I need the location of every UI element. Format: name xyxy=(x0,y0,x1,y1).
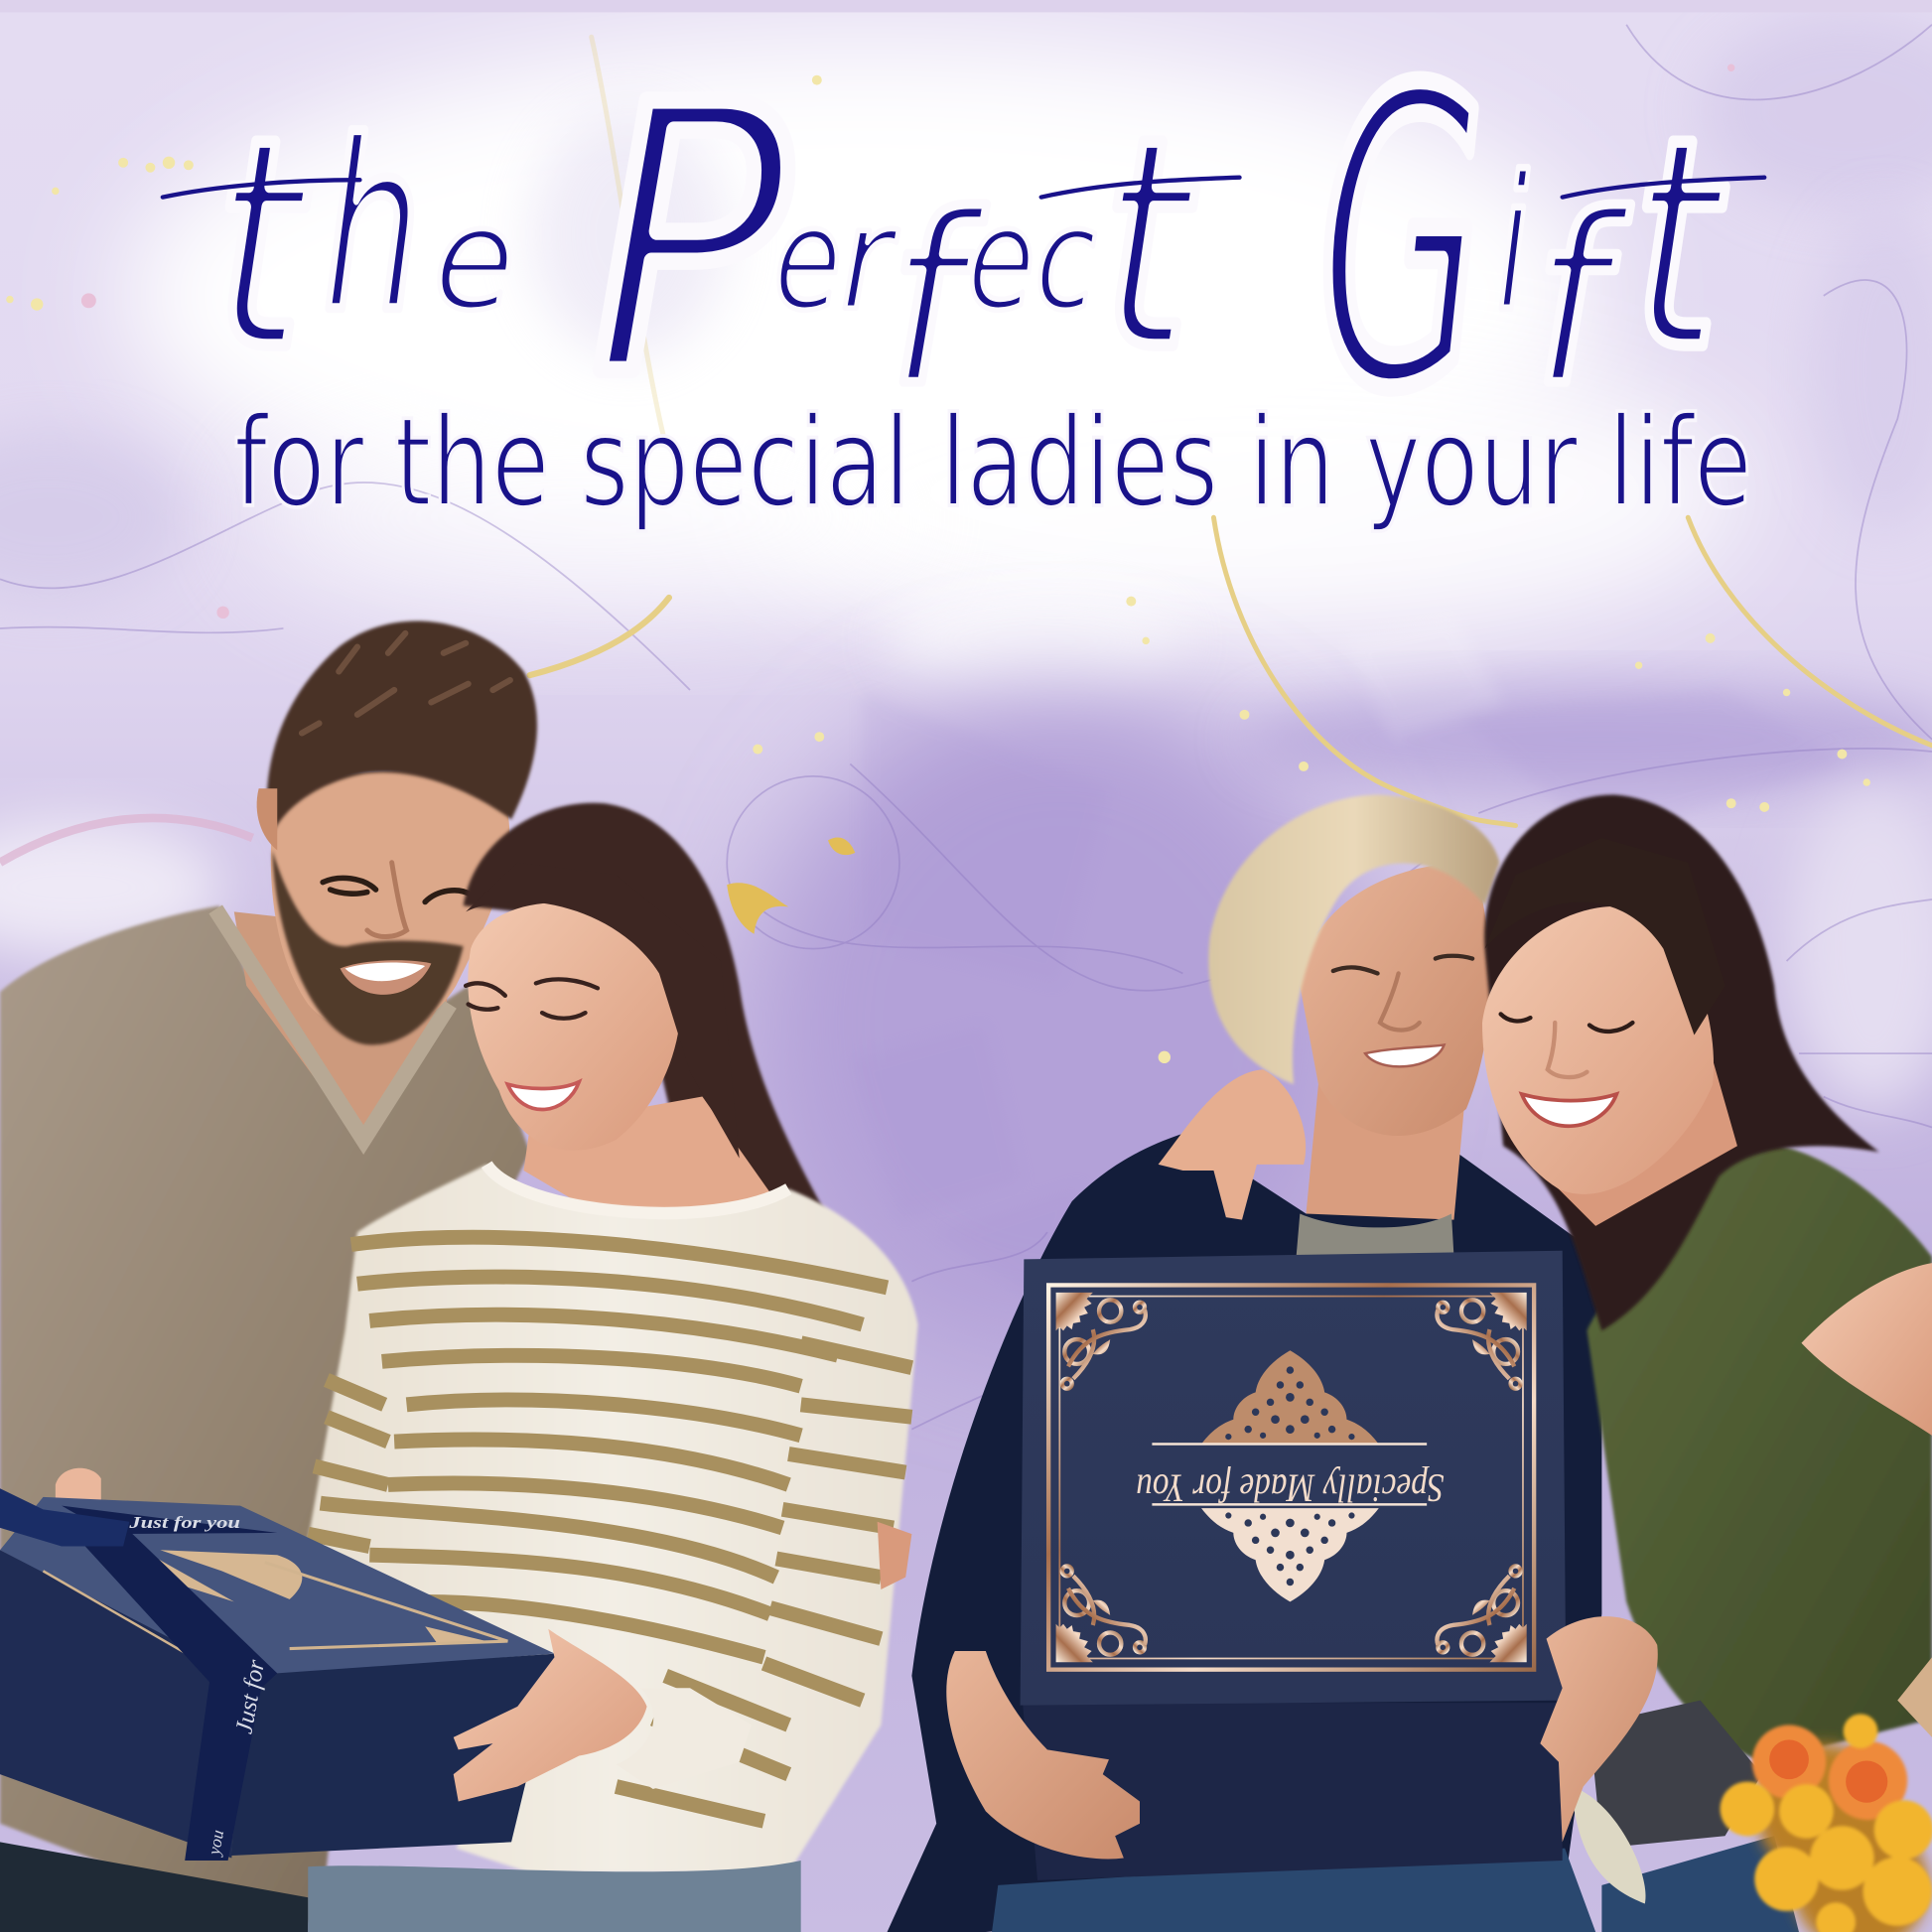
gift box left: you xyxy=(205,1828,227,1859)
title word: Perfect: t xyxy=(1103,75,1199,413)
man jeans xyxy=(0,1842,308,1932)
man nose xyxy=(367,863,407,937)
title word: Perfect: P xyxy=(592,26,790,457)
daughter face xyxy=(1482,906,1714,1194)
title word: Gift: G xyxy=(1318,5,1484,479)
title word: the: t xyxy=(215,75,312,413)
box inscription: Specially Made for You xyxy=(1136,1466,1445,1510)
man hand xyxy=(56,1468,101,1501)
woman face xyxy=(468,902,681,1151)
title word: Perfect: c xyxy=(1035,177,1097,342)
ribbon text: Just for you xyxy=(128,1513,240,1532)
box base xyxy=(1023,1703,1563,1880)
man face xyxy=(271,771,509,1035)
cardigan xyxy=(888,1134,1601,1932)
woman hand xyxy=(454,1629,647,1801)
sweater stripes xyxy=(308,1237,911,1821)
center ornament xyxy=(1152,1350,1427,1601)
mother face xyxy=(1300,863,1490,1136)
gift box left: Just for xyxy=(230,1657,270,1735)
man beard xyxy=(272,850,464,1044)
gift box left xyxy=(0,1488,557,1861)
title word: the: h xyxy=(323,90,421,363)
green shirt xyxy=(1587,1144,1932,1762)
woman jeans xyxy=(308,1861,801,1932)
title word: Perfect: f xyxy=(890,165,987,438)
right hand xyxy=(1540,1616,1658,1842)
jeans right xyxy=(992,1836,1799,1932)
left hand xyxy=(946,1651,1140,1859)
photo: man and woman with gift box xyxy=(0,621,918,1932)
arm xyxy=(1801,1263,1932,1436)
woman neck xyxy=(523,1097,776,1232)
daughter neck xyxy=(1547,1059,1737,1226)
title word: the: e xyxy=(434,177,515,342)
subtitle: for the special ladies in your life xyxy=(234,391,1752,535)
box end face xyxy=(231,1654,557,1856)
man hair xyxy=(266,621,537,832)
hand on shoulder xyxy=(1159,1069,1306,1220)
mother nose xyxy=(1380,973,1420,1031)
woman sweater xyxy=(308,1165,918,1872)
daughter hair xyxy=(1484,794,1879,1330)
title word: Perfect: e xyxy=(773,177,842,342)
title xyxy=(163,5,1764,479)
gift box right xyxy=(1021,1251,1566,1880)
woman hair xyxy=(464,803,828,1217)
gold lace xyxy=(108,1547,486,1644)
title word: Perfect: e xyxy=(967,177,1035,342)
man neck xyxy=(234,911,456,1146)
flowers xyxy=(1721,1657,1932,1932)
title word: Gift: i xyxy=(1497,136,1529,351)
box top face xyxy=(0,1497,554,1678)
box lid xyxy=(1021,1251,1566,1706)
title word: Gift: t xyxy=(1632,75,1728,413)
mother neck xyxy=(1307,1084,1466,1220)
grey top xyxy=(1297,1213,1453,1257)
box side face xyxy=(0,1550,242,1859)
photo: mother and daughter with gift box xyxy=(888,794,1932,1932)
couch xyxy=(1589,1701,1762,1849)
mother hair xyxy=(1208,794,1499,1084)
ribbon xyxy=(73,1516,277,1861)
man sweater xyxy=(0,905,530,1922)
corner ornaments xyxy=(1056,1293,1527,1662)
title word: Gift: f xyxy=(1534,165,1631,438)
gold frame xyxy=(1048,1285,1534,1670)
title word: Perfect: r xyxy=(840,177,899,342)
daughter nose xyxy=(1548,1023,1587,1077)
